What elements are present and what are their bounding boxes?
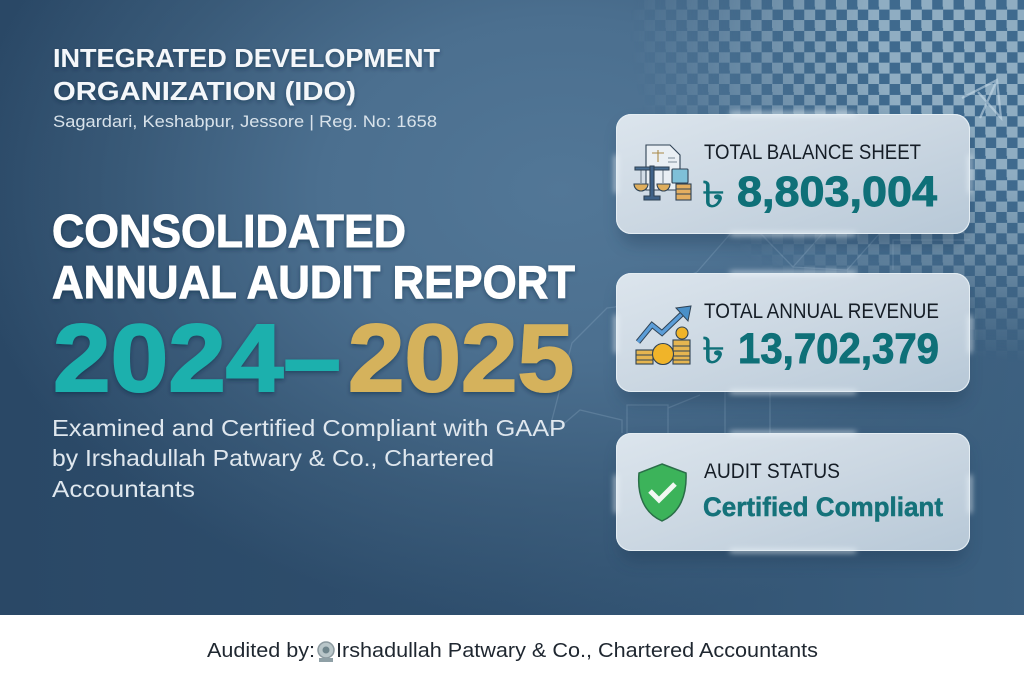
report title: ANNUAL AUDIT REPORT: [52, 256, 575, 308]
decorative skyline chart in background: [548, 217, 970, 435]
icon: growth arrow and coins: [636, 306, 691, 364]
icon: scales and document: [634, 145, 691, 200]
icon: outline arrow top right: [962, 80, 1001, 118]
report year: 2024–: [53, 305, 341, 412]
amount: 8,803,004: [737, 168, 937, 216]
label: TOTAL ANNUAL REVENUE: [704, 299, 939, 323]
amount: ৳: [702, 330, 725, 371]
card: total annual revenue: [616, 273, 970, 402]
label: AUDIT STATUS: [704, 459, 840, 483]
icon: green shield with check: [639, 464, 686, 521]
certification description: [52, 415, 566, 502]
card: audit status: [616, 433, 970, 561]
organization heading: ORGANIZATION (IDO): [53, 76, 356, 106]
organization address: Sagardari, Keshabpur, Jessore | Reg. No: 1658: [53, 112, 437, 131]
footer auditor name: Irshadullah Patwary & Co., Chartered Accountants: [336, 640, 818, 662]
card: total balance sheet: [616, 114, 970, 244]
report year: 2025: [348, 305, 574, 412]
certification description: by Irshadullah Patwary & Co., Chartered: [52, 445, 494, 471]
amount: 13,702,379: [738, 325, 939, 373]
organization heading: INTEGRATED DEVELOPMENT: [53, 43, 440, 73]
organization heading: [53, 43, 440, 106]
report year: [53, 305, 574, 412]
certification description: Accountants: [52, 476, 195, 502]
amount: ৳: [702, 174, 725, 215]
label: TOTAL BALANCE SHEET: [704, 140, 921, 164]
icon: auditor seal: [318, 642, 334, 662]
report title: [52, 205, 575, 308]
footer band: [0, 615, 1024, 683]
report title: CONSOLIDATED: [52, 205, 406, 257]
footer text: Audited by:: [207, 640, 315, 662]
certification description: Examined and Certified Compliant with GAAP: [52, 415, 566, 441]
status value: Certified Compliant: [703, 492, 943, 522]
